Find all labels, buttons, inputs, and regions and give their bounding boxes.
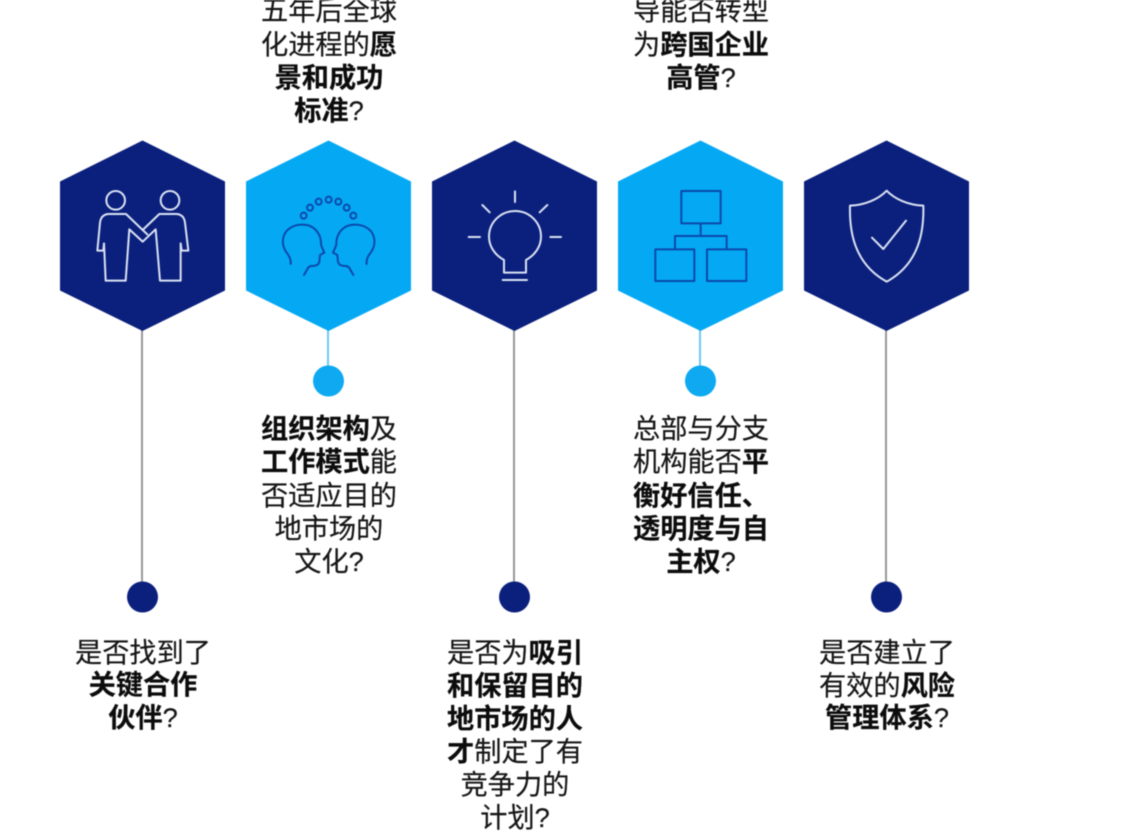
icon: two heads with thought dots	[283, 197, 374, 275]
text: vision and success criteria: 景和成功	[275, 62, 383, 93]
text: leaders becoming multinational executives: 高管?	[666, 62, 736, 93]
text: risk management system: 有效的风险	[819, 670, 955, 701]
column 5: risk management	[804, 140, 969, 733]
dot 5	[871, 582, 902, 612]
column 2: vision and culture	[246, 0, 411, 577]
text: organisation and working model: 组织架构及	[261, 413, 397, 444]
text: talent plan: 才制定了有	[447, 736, 583, 767]
text: balance between HQ and branches: 机构能否平	[633, 446, 769, 477]
dot 3	[499, 582, 530, 612]
dot 4	[685, 366, 716, 396]
text: risk management system: 管理体系?	[825, 702, 949, 733]
dot 2	[313, 366, 344, 396]
text: balance between HQ and branches: 衡好信任、	[633, 480, 769, 511]
text: key partners: 关键合作	[89, 669, 197, 700]
hexagon 5	[804, 140, 969, 331]
text: talent plan: 竞争力的	[461, 769, 569, 800]
text: key partners: 伙伴?	[108, 702, 178, 733]
text: talent plan: 和保留目的	[447, 670, 583, 701]
hexagon 1	[60, 140, 225, 331]
icon: two people shaking hands	[97, 191, 188, 281]
text: talent plan: 是否为吸引	[447, 637, 583, 668]
text: risk management system: 是否建立了	[819, 637, 955, 668]
text: talent plan: 计划?	[480, 802, 550, 833]
text: organisation and working model: 工作模式能	[261, 446, 397, 477]
text: talent plan: 地市场的人	[447, 703, 583, 734]
column 1: key partners	[60, 140, 225, 733]
column 3: talent	[432, 140, 597, 833]
text: leaders becoming multinational executives: 为跨国企业	[633, 29, 769, 60]
icon: light bulb	[469, 191, 561, 280]
connector line 2	[327, 330, 329, 381]
hexagon 3	[432, 140, 597, 331]
text: organisation and working model: 否适应目的	[261, 480, 397, 511]
icon: shield with check mark	[850, 191, 923, 282]
connector line 3	[513, 330, 515, 597]
text: vision and success criteria: 化进程的愿	[261, 29, 397, 60]
text: organisation and working model: 地市场的	[275, 513, 383, 544]
connector line 1	[141, 330, 143, 597]
connector line 4	[699, 330, 701, 381]
text: key partners: 是否找到了	[75, 637, 211, 668]
text: vision and success criteria: 标准?	[294, 95, 364, 126]
text: balance between HQ and branches: 主权?	[666, 546, 736, 577]
text: balance between HQ and branches: 总部与分支	[633, 413, 769, 444]
hexagon 4	[618, 140, 783, 331]
column 4: leadership and governance	[618, 0, 783, 577]
connector line 5	[885, 330, 887, 597]
text: organisation and working model: 文化?	[294, 546, 364, 577]
text: balance between HQ and branches: 透明度与自	[633, 513, 769, 544]
icon: organisation chart	[655, 191, 746, 281]
dot 1	[127, 582, 158, 612]
hexagon 2	[246, 140, 411, 331]
